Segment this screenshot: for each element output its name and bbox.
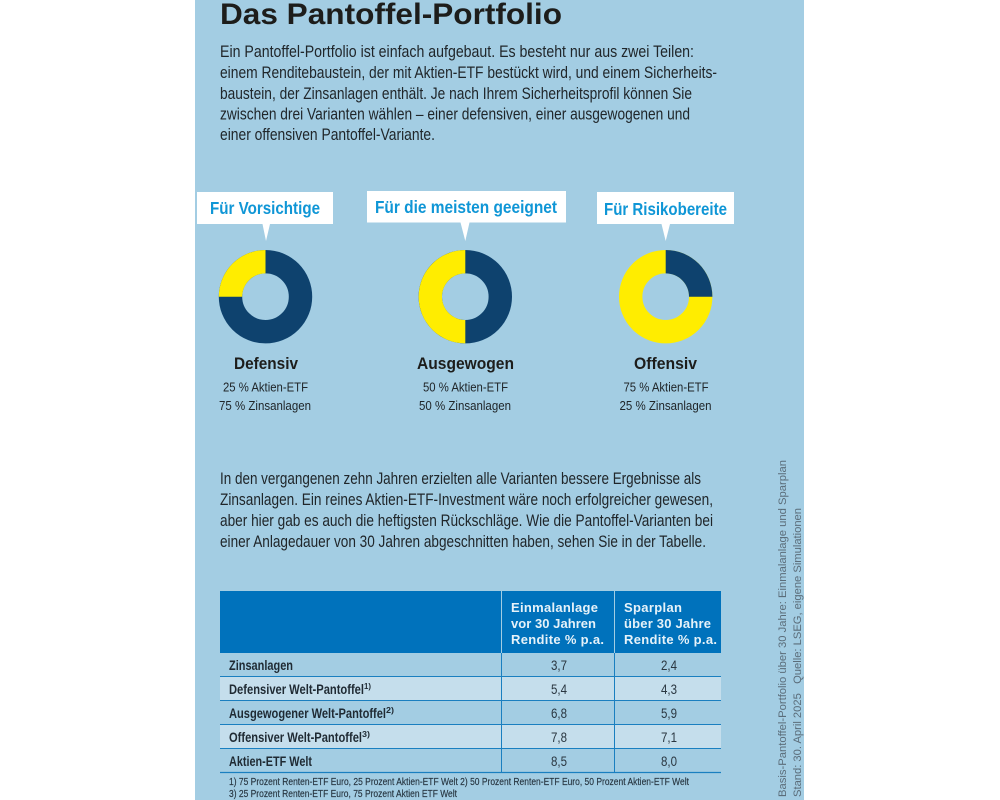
table row: Offensiver Welt-Pantoffel: 7,1	[661, 729, 677, 745]
table row: Ausgewogener Welt-Pantoffel: 6,8	[551, 705, 567, 721]
callout: Für die meisten geeignet: Für die meisten geeignet	[375, 197, 557, 217]
rotated source note: Stand: 30. April 2025 Quelle: LSEG, eigene Simulationen	[792, 508, 804, 797]
table header row: Rendite % p.a.	[624, 632, 717, 647]
intro text block: Ein Pantoffel-Portfolio ist einfach aufgebaut. Es besteht nur aus zwei Teilen:	[220, 43, 694, 61]
callout: Für Vorsichtige	[197, 192, 333, 241]
table header row: Sparplan	[624, 600, 682, 615]
label: Defensiv: Defensiv	[234, 355, 299, 373]
table row: Defensiver Welt-Pantoffel	[229, 681, 677, 697]
table row: Offensiver Welt-Pantoffel: 3)	[362, 730, 370, 739]
table row: Zinsanlagen: Zinsanlagen	[229, 658, 293, 673]
intro text block: einer offensiven Pantoffel-Variante.	[220, 126, 435, 144]
panel: variant Defensiv	[197, 192, 333, 413]
table row: Offensiver Welt-Pantoffel: Offensiver Welt-Pantoffel	[229, 730, 362, 745]
footnotes: 3) 25 Prozent Renten-ETF Euro, 75 Prozent Aktien ETF Welt	[229, 789, 457, 800]
callout: Für Vorsichtige: Für Vorsichtige	[210, 198, 320, 218]
rotated source note: Basis-Pantoffel-Portfolio über 30 Jahre: Einmalanlage und Sparplan	[777, 460, 789, 797]
table header row: Einmalanlage	[511, 600, 598, 615]
table row: Offensiver Welt-Pantoffel: 7,8	[551, 729, 567, 745]
table row: Aktien-ETF Welt	[229, 753, 677, 769]
table header row	[220, 591, 721, 653]
panel: blue page background	[195, 0, 804, 800]
allocation text: Offensiv: 25 % Zinsanlagen	[620, 398, 712, 413]
second text block: Zinsanlagen. Ein reines Aktien-ETF-Investment wäre noch erfolgreicher gewesen,	[220, 491, 713, 509]
allocation text: Defensiv: 75 % Zinsanlagen	[219, 398, 311, 413]
label: Ausgewogen: Ausgewogen	[417, 355, 514, 373]
table row: Defensiver Welt-Pantoffel: 1)	[364, 682, 371, 691]
donut chart: 75 percent stocks, 25 percent interest	[631, 250, 712, 332]
table row: Zinsanlagen	[229, 657, 677, 673]
allocation text: Offensiv: 75 % Aktien-ETF	[624, 380, 709, 394]
table row: Aktien-ETF Welt: 8,0	[661, 753, 677, 769]
allocation text: Offensiv	[620, 380, 712, 413]
table row: Defensiver Welt-Pantoffel: Defensiver Welt-Pantoffel	[229, 682, 364, 697]
callout: Für Risikobereite	[597, 192, 734, 241]
second text block: In den vergangenen zehn Jahren erzielten alle Varianten bessere Ergebnisse als	[220, 470, 701, 488]
table: returns over 30 years	[220, 591, 721, 772]
rotated source note	[777, 460, 804, 797]
table row: Offensiver Welt-Pantoffel	[229, 729, 677, 745]
intro text block: baustein, der Zinsanlagen enthält. Je nach Ihrem Sicherheitsprofil können Sie	[220, 85, 692, 103]
table row: Zinsanlagen: 2,4	[661, 657, 677, 673]
table header row: vor 30 Jahren	[511, 616, 596, 631]
table row: Aktien-ETF Welt: 8,5	[551, 753, 567, 769]
panel: variant Ausgewogen	[367, 191, 566, 413]
allocation text: Ausgewogen	[419, 380, 511, 413]
table header row: Rendite % p.a.	[511, 632, 604, 647]
allocation text: Defensiv: 25 % Aktien-ETF	[223, 380, 308, 394]
second text block: aber hier gab es auch die heftigsten Rückschläge. Wie die Pantoffel-Varianten bei	[220, 512, 713, 530]
intro text block: zwischen drei Varianten wählen – einer defensiven, einer ausgewogenen und	[220, 106, 690, 124]
allocation text: Ausgewogen: 50 % Aktien-ETF	[423, 380, 508, 394]
table row: Zinsanlagen: 3,7	[551, 657, 567, 673]
table row: Ausgewogener Welt-Pantoffel: 5,9	[661, 705, 677, 721]
table row: Defensiver Welt-Pantoffel: 4,3	[661, 681, 677, 697]
footnotes	[229, 777, 689, 800]
callout: Für Risikobereite: Für Risikobereite	[604, 199, 727, 219]
donut chart: 50 percent stocks, 50 percent interest	[419, 250, 500, 343]
panel: variant Offensiv	[597, 192, 734, 413]
intro text block	[220, 43, 717, 144]
table row: Aktien-ETF Welt: Aktien-ETF Welt	[229, 754, 312, 769]
table header row: über 30 Jahre	[624, 616, 711, 631]
table row: Ausgewogener Welt-Pantoffel: 2)	[386, 706, 394, 715]
callout: Für die meisten geeignet	[367, 191, 566, 241]
second text block: einer Anlagedauer von 30 Jahren abgeschnitten haben, sehen Sie in der Tabelle.	[220, 533, 706, 551]
second text block	[220, 470, 713, 551]
label: Offensiv: Offensiv	[634, 355, 698, 373]
allocation text: Defensiv	[219, 380, 311, 413]
table row: Ausgewogener Welt-Pantoffel	[229, 705, 677, 721]
allocation text: Ausgewogen: 50 % Zinsanlagen	[419, 398, 511, 413]
intro text block: einem Renditebaustein, der mit Aktien-ETF bestückt wird, und einem Sicherheits-	[220, 64, 717, 82]
table row: Defensiver Welt-Pantoffel: 5,4	[551, 681, 567, 697]
donut chart: 25 percent stocks, 75 percent interest	[219, 250, 300, 332]
footnotes: 1) 75 Prozent Renten-ETF Euro, 25 Prozent Aktien-ETF Welt 2) 50 Prozent Renten-ETF Euro, 50 Prozent Aktien-ETF Welt	[229, 777, 689, 788]
table row: Ausgewogener Welt-Pantoffel: Ausgewogener Welt-Pantoffel	[229, 706, 386, 721]
